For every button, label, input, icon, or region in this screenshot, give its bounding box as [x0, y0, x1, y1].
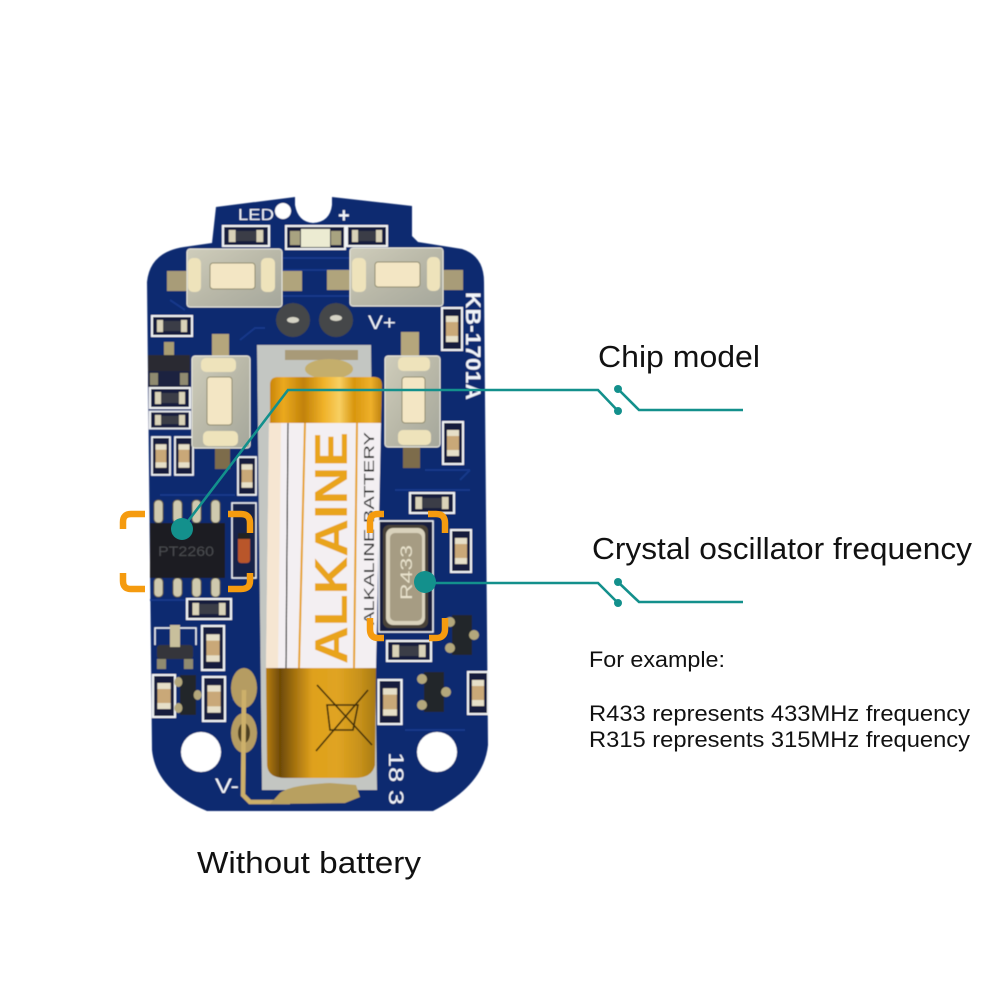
heading: chip model: Chip model	[598, 339, 760, 374]
battery type text: ALKALINE BATTERY	[361, 432, 378, 625]
solder joints	[276, 303, 353, 337]
text block: frequency example: R433 represents 433MHz frequency	[589, 701, 970, 726]
tactile switch: left	[192, 334, 250, 469]
highlight brackets: chip	[123, 514, 250, 589]
mounting holes	[181, 203, 457, 772]
board outline	[147, 197, 488, 811]
text block: frequency example: R315 represents 315MHz frequency	[589, 727, 970, 752]
recycling icon	[316, 685, 372, 751]
diode	[232, 503, 256, 578]
battery brand text: ALKAINE	[305, 432, 357, 664]
callout line: crystal oscillator	[414, 571, 743, 607]
panel: circuit board photo	[147, 197, 488, 811]
chip PT2260	[150, 500, 225, 597]
silkscreen labels: +	[338, 205, 350, 227]
wire and pads	[231, 668, 360, 804]
tactile switch: top left	[167, 249, 302, 307]
text block: frequency example: For example:	[589, 647, 725, 672]
crystal oscillator	[379, 521, 433, 632]
silkscreen labels	[215, 205, 484, 805]
silkscreen labels: V-	[215, 775, 239, 798]
caption: without battery: Without battery	[197, 845, 422, 880]
text block: frequency example	[589, 647, 970, 752]
highlight brackets: crystal	[370, 514, 445, 638]
silkscreen labels: LED	[238, 207, 274, 224]
tactile switch: right	[385, 332, 440, 468]
silkscreen labels: KB-1701A	[461, 292, 484, 400]
battery holder	[257, 345, 377, 790]
small components	[148, 226, 488, 724]
silkscreen labels: V+	[368, 313, 396, 334]
silkscreen labels: 18 3	[384, 752, 407, 805]
callout line: chip model	[171, 385, 743, 540]
battery	[266, 350, 382, 778]
chip PT2260: PT2260	[158, 543, 214, 559]
heading: crystal oscillator frequency: Crystal oscillator frequency	[592, 531, 973, 566]
tactile switch: top right	[327, 248, 463, 306]
LED	[286, 226, 345, 249]
crystal oscillator: R433	[397, 545, 416, 600]
board traces	[150, 258, 470, 730]
